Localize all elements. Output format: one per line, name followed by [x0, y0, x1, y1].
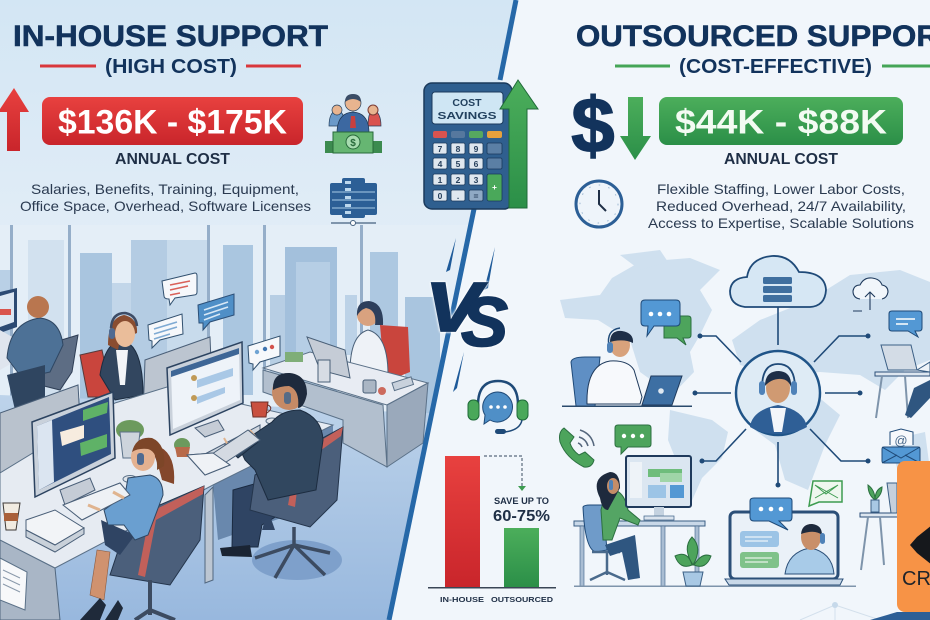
- label: save up to: 60-75%: [493, 508, 550, 525]
- VS badge with lightning streaks: V: [425, 268, 487, 346]
- text: outsourced benefits: [648, 181, 914, 231]
- dashed savings arrow: [484, 456, 526, 491]
- icon: green down arrow: [620, 97, 651, 160]
- desk items: [0, 402, 278, 610]
- bar: outsourced: [504, 528, 539, 587]
- icon: clock: [576, 181, 622, 227]
- laptop video call: [725, 498, 843, 585]
- label: in-house: IN-HOUSE: [440, 595, 484, 604]
- icon: manager with money: $: [350, 138, 356, 149]
- panel: office scene: [0, 225, 475, 620]
- monitor: chat screen, front: [32, 392, 115, 505]
- icon: potted plant: [675, 537, 711, 586]
- dark corner accent: [870, 612, 930, 620]
- label: annual cost: ANNUAL COST: [724, 151, 839, 168]
- icon: calculator with cost savings: .: [457, 191, 459, 201]
- left panel background: [0, 0, 517, 620]
- price pill: in-house: $136K - $175K: [58, 104, 287, 142]
- text: outsourced benefits: Flexible Staffing, Lower Labor Costs,: [657, 181, 905, 197]
- icon: calculator with cost savings: 7: [438, 144, 443, 154]
- icon: cloud with server: [730, 256, 826, 307]
- icon: manager with money: [325, 94, 382, 153]
- world map background: [560, 250, 930, 505]
- label: save up to: SAVE UP TO: [494, 496, 549, 507]
- price pill: in-house: [42, 97, 303, 145]
- icon: green mail bubble: [809, 481, 842, 506]
- icon: calculator with cost savings: 3: [474, 175, 479, 185]
- agent at desktop computer: [574, 456, 856, 587]
- icon: calculator with cost savings: [424, 80, 538, 209]
- axis line: [428, 587, 556, 588]
- icon: central agent in circle: [736, 351, 820, 435]
- label: annual cost: ANNUAL COST: [115, 151, 231, 168]
- back desk with agent: [263, 301, 428, 467]
- icon: calculator with cost savings: +: [492, 182, 497, 192]
- icon: server rack: [330, 178, 377, 226]
- label: save up to: [493, 496, 550, 525]
- agent with laptop and bubbles: [562, 300, 692, 407]
- icon: calculator with cost savings: 8: [456, 144, 461, 154]
- icon: calculator with cost savings: 9: [474, 144, 479, 154]
- text: in-house cost items: Office Space, Overhead, Software Licenses: [20, 198, 311, 214]
- subheading: cost-effective: [615, 56, 930, 78]
- icon: calculator with cost savings: COST: [452, 97, 482, 109]
- icon: email envelope: [882, 429, 920, 463]
- VS badge with lightning streaks: S: [461, 283, 508, 361]
- gray monitor backs: [0, 337, 212, 478]
- woman agent in front: [63, 438, 204, 620]
- icon: calculator with cost savings: SAVINGS: [438, 110, 496, 122]
- text: in-house cost items: [20, 181, 311, 214]
- bar chart: savings comparison: [428, 456, 556, 604]
- text: outsourced benefits: Reduced Overhead, 24/7 Availability,: [656, 198, 906, 214]
- VS badge with lightning streaks: [425, 238, 508, 392]
- icon: green chat bubble: [615, 425, 651, 454]
- subheading: cost-effective: (COST-EFFECTIVE): [679, 56, 872, 78]
- price pill: outsourced: $44K - $88K: [675, 104, 887, 142]
- man agent with headset: [187, 373, 343, 580]
- icon: upload cloud: [853, 278, 888, 311]
- skyline through windows: [0, 225, 475, 417]
- heading: in-house support: IN-HOUSE SUPPORT: [13, 20, 328, 53]
- icon: calculator with cost savings: 2: [456, 175, 461, 185]
- chat bubbles in office: [148, 273, 280, 370]
- icon: calculator with cost savings: 1: [438, 175, 443, 185]
- icon: calculator with cost savings: 0: [438, 191, 443, 201]
- divider: diagonal blue line: [389, 0, 516, 620]
- icon: blue message bubble: [889, 311, 922, 337]
- icon: green phone with signal: [560, 428, 594, 467]
- woman agent in the middle row: [80, 313, 143, 400]
- floor: [0, 395, 470, 620]
- price pill: outsourced: [659, 97, 903, 145]
- icon: calculator with cost savings: 6: [474, 159, 479, 169]
- icon: calculator with cost savings: =: [474, 191, 479, 201]
- icon: email envelope: @: [894, 433, 908, 448]
- icon: calculator with cost savings: 5: [456, 159, 461, 169]
- subheading: high cost: (HIGH COST): [105, 56, 237, 78]
- watermark: orange logo badge: [897, 461, 930, 612]
- agent at right with laptop: [875, 345, 930, 418]
- faint network decoration: [800, 602, 880, 620]
- network connectors: [692, 305, 870, 488]
- icon: dollar sign: $: [571, 81, 615, 169]
- main shared desk: [0, 387, 333, 620]
- label: outsourced: OUTSOURCED: [491, 595, 554, 604]
- text: outsourced benefits: Access to Expertise, Scalable Solutions: [648, 215, 914, 231]
- text: in-house cost items: Salaries, Benefits, Training, Equipment,: [31, 181, 299, 197]
- monitor: support software: [167, 342, 243, 437]
- icon: red up arrow: [0, 88, 29, 151]
- agent at top-left: [0, 288, 78, 410]
- right desk with plant: [860, 483, 900, 570]
- icon: calculator with cost savings: 4: [438, 159, 443, 169]
- icon: headset with chat bubble: [468, 381, 528, 434]
- bar: in-house: [445, 456, 480, 587]
- subheading: high cost: [40, 56, 301, 78]
